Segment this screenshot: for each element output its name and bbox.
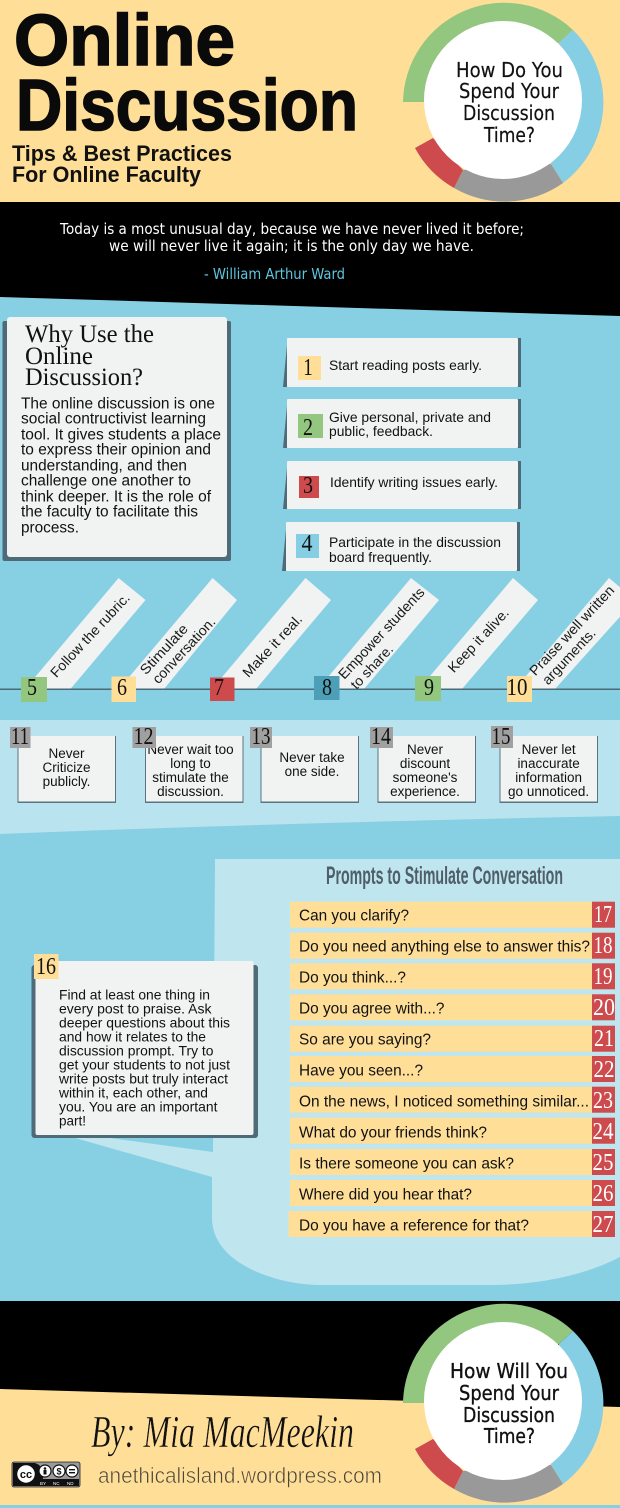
tip card 4: board frequently.: [329, 549, 432, 565]
card 15: go unnoticed.: [508, 784, 589, 799]
card 11: 11: [11, 724, 29, 750]
band: never list: [0, 720, 620, 834]
card 12: long to: [170, 756, 211, 771]
card 12: stimulate the: [152, 770, 229, 785]
header banner: [0, 0, 620, 202]
panel heading: Why Use the: [25, 321, 154, 348]
panel body text: understanding, and then: [21, 457, 187, 474]
icon: creative commons badge: [12, 1462, 80, 1487]
card 16 body text: write posts but truly interact: [58, 1070, 228, 1086]
card 16 body text: every post to praise. Ask: [59, 1000, 212, 1016]
panel body text: process.: [21, 519, 79, 536]
donut question text: How Do You: [456, 58, 563, 82]
panel body text: The online discussion is one: [21, 395, 215, 412]
ribbon: follow the rubric: [25, 578, 146, 689]
badge 9: 9: [424, 675, 434, 701]
tip card 4: [282, 522, 520, 571]
prompt 22: Have you seen...?: [299, 1062, 423, 1080]
icon: creative commons badge: cc: [20, 1469, 32, 1481]
card 15: information: [515, 770, 582, 785]
title: [14, 1, 358, 146]
prompt 22: 22: [594, 1057, 614, 1083]
panel body text: the faculty to facilitate this: [21, 504, 198, 521]
badge 5: 5: [27, 675, 37, 701]
donut question text: [456, 58, 563, 147]
card 14: discount: [400, 756, 450, 771]
website url: anethicalisland.wordpress.com: [98, 1463, 382, 1488]
prompt 25: [290, 1149, 615, 1176]
card 15: Never let: [522, 742, 576, 757]
donut question text: How Will You: [450, 1359, 568, 1383]
donut chart: bottom: [403, 1304, 603, 1503]
tip card 1: [283, 338, 521, 387]
ribbon: keep it alive: Keep it alive.: [444, 605, 512, 676]
card 12: discussion.: [157, 784, 224, 799]
icon: creative commons badge: NC: [53, 1481, 60, 1486]
tip card 3: Identify writing issues early.: [330, 474, 498, 490]
prompt 17: Can you clarify?: [299, 908, 409, 925]
prompt 19: 19: [594, 964, 612, 990]
prompt 21: [290, 1026, 615, 1052]
ribbon: praise well written arguments: arguments.: [539, 625, 599, 688]
quote text: we will never live it again; it is the only day we have.: [109, 237, 474, 255]
ribbon: stimulate conversation: [119, 578, 237, 689]
donut question text: Time?: [483, 123, 535, 147]
card 16 body text: within it, each other, and: [58, 1084, 208, 1100]
prompt 24: 24: [592, 1119, 614, 1145]
card 16 body text: deeper questions about this: [59, 1014, 230, 1030]
donut chart: top: [403, 3, 603, 202]
prompt 18: 18: [594, 933, 612, 959]
card 13: [250, 724, 359, 803]
prompt 27: [288, 1211, 615, 1238]
title: Discussion: [16, 66, 358, 146]
card 11: Criticize: [42, 760, 91, 775]
prompt 19: [290, 963, 615, 990]
donut question text: Spend Your: [459, 1381, 560, 1405]
badge 6: [112, 675, 136, 702]
tip card 1: Start reading posts early.: [329, 357, 482, 373]
timeline: tips 5 to 10: [0, 578, 620, 702]
quote text: [59, 220, 524, 255]
quote band: [0, 202, 620, 316]
badge 5: [21, 675, 47, 702]
ribbon: stimulate conversation: conversation.: [149, 614, 218, 687]
prompt 17: [290, 902, 615, 928]
panel heading: Discussion?: [25, 364, 143, 391]
badge 10: 10: [506, 675, 528, 701]
subtitle: For Online Faculty: [12, 162, 202, 187]
card 16 body text: and how it relates to the: [59, 1028, 206, 1044]
donut question text: Time?: [483, 1424, 535, 1448]
card 12: [132, 724, 244, 803]
tip card 1: 1: [303, 355, 313, 381]
prompt 21: So are you saying?: [299, 1032, 431, 1048]
prompt 25: Is there someone you can ask?: [299, 1156, 514, 1172]
panel body text: tool. It gives students a place: [21, 426, 221, 443]
card 16 body text: part!: [59, 1112, 86, 1128]
tip card 2: public, feedback.: [329, 423, 433, 439]
badge 8: [314, 675, 340, 701]
ribbon: follow the rubric: Follow the rubric.: [47, 590, 133, 680]
quote text: Today is a most unusual day, because we have never lived it before;: [59, 220, 524, 238]
ribbon: keep it alive: [419, 578, 538, 689]
prompt 20: [290, 994, 615, 1021]
prompt 27: 27: [592, 1212, 614, 1238]
card 14: 14: [371, 724, 391, 750]
panel body text: challenge one another to: [21, 473, 191, 490]
prompt 27: Do you have a reference for that?: [299, 1218, 529, 1234]
card 14: Never: [407, 742, 444, 757]
card 16 body text: get your students to not just: [59, 1056, 230, 1072]
ribbon: empower students to share: [318, 578, 439, 692]
card 16 body text: [58, 986, 230, 1128]
donut question text: [450, 1359, 568, 1448]
donut question text: Spend Your: [459, 79, 560, 103]
prompt 26: [290, 1180, 615, 1207]
prompt 23: [290, 1087, 615, 1114]
tip card 3: [283, 461, 521, 509]
ribbon: stimulate conversation: Stimulate: [136, 620, 191, 678]
card 13: Never take: [279, 750, 345, 765]
prompt 19: Do you think...?: [299, 970, 406, 986]
card 12: 12: [134, 724, 154, 750]
prompt 18: Do you need anything else to answer this?: [299, 939, 590, 956]
card 15: inaccurate: [517, 756, 580, 771]
author signature: By: Mia MacMeekin: [91, 1406, 354, 1457]
ribbon: praise well written arguments: Praise well written: [526, 582, 617, 679]
quote attribution: - William Arthur Ward: [204, 265, 345, 283]
ribbon: make it real: [212, 578, 331, 689]
card 14: someone's: [393, 770, 458, 785]
prompt 23: 23: [593, 1088, 613, 1114]
card 16 body text: Find at least one thing in: [59, 986, 210, 1002]
panel body text: [21, 395, 221, 536]
tip card 2: 2: [303, 415, 313, 441]
ribbon: empower students to share: to share.: [347, 641, 396, 692]
tip card 2: [283, 399, 521, 448]
prompt 24: What do your friends think?: [299, 1124, 487, 1142]
tip card 4: 4: [302, 531, 312, 557]
badge 7: 7: [214, 675, 224, 701]
panel heading: [25, 321, 154, 391]
prompt 23: On the news, I noticed something similar...: [299, 1094, 589, 1110]
badge 7: [210, 675, 234, 701]
footer band: [0, 1301, 620, 1508]
tip card 3: 3: [303, 473, 313, 499]
card 16 body text: you. You are an important: [59, 1098, 218, 1114]
prompt 26: 26: [592, 1181, 614, 1207]
tip card 2: Give personal, private and: [329, 409, 491, 425]
card 16: praise: 16: [36, 954, 56, 980]
ribbon: empower students to share: Empower students: [335, 584, 428, 682]
card 11: Never: [48, 746, 85, 761]
panel: why use the online discussion: [2, 317, 231, 561]
card 16 body text: discussion prompt. Try to: [59, 1042, 214, 1058]
tip card 4: Participate in the discussion: [329, 534, 501, 550]
panel body text: to express their opinion and: [21, 442, 211, 459]
prompt 22: [290, 1056, 615, 1083]
speech bubble panel: prompts: [75, 859, 620, 1285]
prompt 25: 25: [592, 1150, 614, 1176]
ribbon: make it real: Make it real.: [239, 611, 305, 680]
prompt 26: Where did you hear that?: [299, 1186, 472, 1204]
card 11: [10, 724, 116, 803]
badge 9: [415, 675, 441, 701]
donut question text: Discussion: [463, 101, 555, 125]
prompt 17: 17: [594, 902, 612, 928]
prompt 20: 20: [593, 995, 615, 1021]
badge 8: 8: [322, 675, 332, 701]
subtitle: [12, 141, 232, 187]
prompt 20: Do you agree with...?: [299, 1000, 445, 1018]
card 13: 13: [252, 724, 270, 750]
card 16: praise: [32, 954, 258, 1138]
prompt 24: [290, 1118, 615, 1145]
subtitle: Tips & Best Practices: [12, 141, 232, 166]
donut question text: Discussion: [463, 1403, 555, 1427]
prompt 18: [290, 933, 615, 959]
card 15: 15: [492, 724, 510, 750]
card 14: experience.: [390, 784, 460, 799]
title: Online: [14, 1, 235, 81]
card 13: one side.: [285, 764, 339, 779]
badge 6: 6: [117, 675, 127, 701]
icon: creative commons badge: BY: [40, 1481, 46, 1486]
card 14: [370, 724, 476, 803]
card 12: Never wait too: [147, 742, 234, 757]
icon: creative commons badge: ND: [67, 1481, 74, 1486]
card 11: publicly.: [43, 774, 90, 789]
panel heading: Online: [25, 343, 93, 370]
card 15: [491, 724, 598, 803]
panel body text: social contructivist learning: [21, 411, 206, 428]
panel body text: think deeper. It is the role of: [21, 488, 212, 505]
icon: creative commons badge: $: [56, 1466, 62, 1476]
prompt 21: 21: [594, 1026, 614, 1052]
